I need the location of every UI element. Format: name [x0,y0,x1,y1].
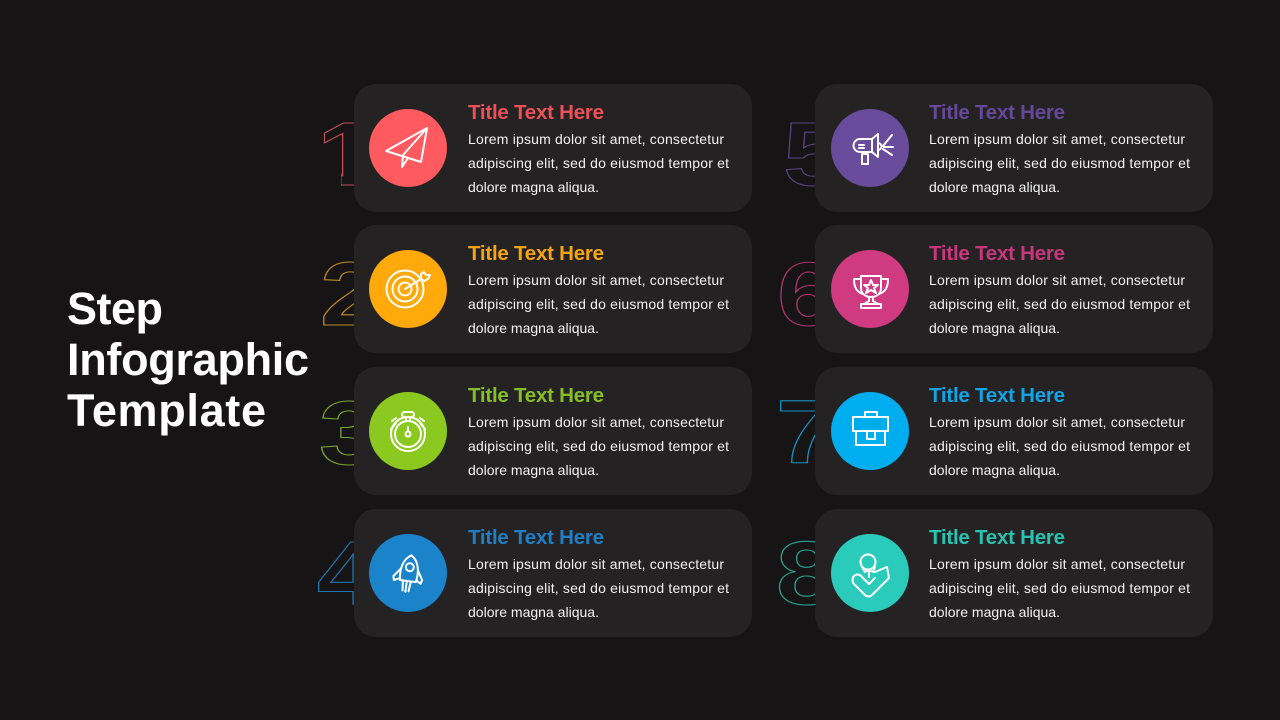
icon: megaphone [831,109,909,187]
card 6 text: adipiscing elit, sed do eiusmod tempor et [929,296,1190,312]
card 8 text: adipiscing elit, sed do eiusmod tempor et [929,580,1190,596]
card 3 text: Title Text Here [468,384,604,407]
card 2 text: dolore magna aliqua. [468,320,599,336]
card 5 [815,84,1213,212]
number 7: 7 [776,382,837,483]
title: Step [67,283,163,334]
card 7 text: dolore magna aliqua. [929,462,1060,478]
card 4 text: dolore magna aliqua. [468,604,599,620]
card 2 text: Lorem ipsum dolor sit amet, consectetur [468,272,724,288]
card 1 text: dolore magna aliqua. [468,179,599,195]
card 3 text [468,384,729,478]
number 6: 6 [777,244,838,345]
card 1 text: adipiscing elit, sed do eiusmod tempor et [468,155,729,171]
card 8 text [929,526,1190,620]
title: Template [67,385,266,436]
number 3: 3 [319,383,380,484]
icon: target [369,250,447,328]
card 3 text: Lorem ipsum dolor sit amet, consectetur [468,414,724,430]
number 4: 4 [317,523,378,624]
icon: briefcase [831,392,909,470]
card 2 text: Title Text Here [468,242,604,265]
card 6 [815,225,1213,353]
step 7 [776,367,1213,495]
card 4 text: Title Text Here [468,526,604,549]
card 7 text: adipiscing elit, sed do eiusmod tempor et [929,438,1190,454]
step 8 [776,509,1213,637]
card 8 text: dolore magna aliqua. [929,604,1060,620]
card 1 text: Lorem ipsum dolor sit amet, consectetur [468,131,724,147]
card 6 text: Title Text Here [929,242,1065,265]
card 3 text: dolore magna aliqua. [468,462,599,478]
icon: stopwatch [369,392,447,470]
card 5 text: dolore magna aliqua. [929,179,1060,195]
card 1 text [468,101,729,195]
card 5 text: adipiscing elit, sed do eiusmod tempor et [929,155,1190,171]
title: Infographic [67,334,309,385]
card 2 text: adipiscing elit, sed do eiusmod tempor et [468,296,729,312]
card 7 text: Title Text Here [929,384,1065,407]
card 3 text: adipiscing elit, sed do eiusmod tempor et [468,438,729,454]
step 5 [783,84,1213,212]
icon: rocket [369,534,447,612]
card 1 [354,84,752,212]
card 4 [354,509,752,637]
number 1 [324,122,354,186]
card 4 text: Lorem ipsum dolor sit amet, consectetur [468,556,724,572]
title [67,283,309,436]
card 7 [815,367,1213,495]
card 6 text: Lorem ipsum dolor sit amet, consectetur [929,272,1185,288]
number 1: 1 [317,104,378,205]
card 8 text: Lorem ipsum dolor sit amet, consectetur [929,556,1185,572]
card 3 [354,367,752,495]
card 1 text: Title Text Here [468,101,604,124]
card 7 text: Lorem ipsum dolor sit amet, consectetur [929,414,1185,430]
card 2 text [468,242,729,336]
card 5 text [929,101,1190,195]
card 5 text: Lorem ipsum dolor sit amet, consectetur [929,131,1185,147]
number 8: 8 [776,523,837,624]
card 8 text: Title Text Here [929,526,1065,549]
step 3 [319,367,752,495]
number 2: 2 [320,244,381,345]
step 4 [317,509,752,637]
card 4 text: adipiscing elit, sed do eiusmod tempor et [468,580,729,596]
icon: person check [831,534,909,612]
card 7 text [929,384,1190,478]
icon: trophy [831,250,909,328]
number 5: 5 [783,104,844,205]
step 6 [777,225,1213,353]
step 1 [317,84,752,212]
card 8 [815,509,1213,637]
card 4 text [468,526,729,620]
card 6 text [929,242,1190,336]
step 2 [320,225,752,353]
icon: paper plane [369,109,447,187]
card 5 text: Title Text Here [929,101,1065,124]
card 2 [354,225,752,353]
card 6 text: dolore magna aliqua. [929,320,1060,336]
